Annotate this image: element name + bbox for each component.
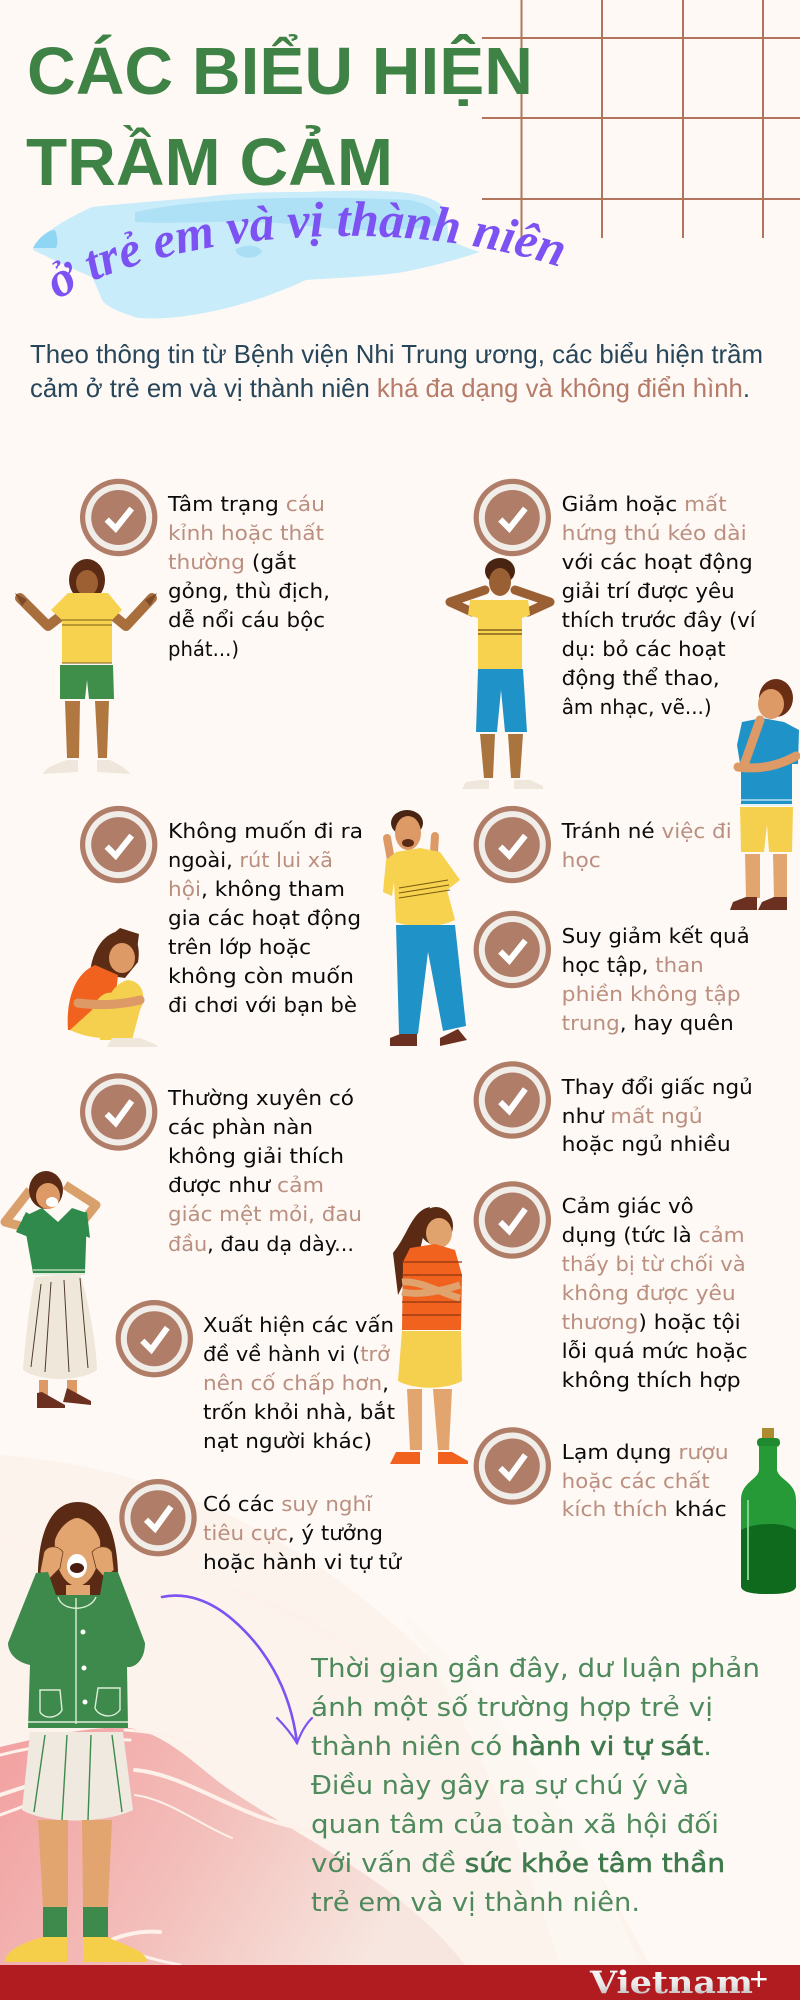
closing text: trẻ em và vị thành niên. xyxy=(311,1888,640,1918)
figure: woman in green top holding head xyxy=(5,1171,97,1408)
icon: check 9 xyxy=(474,1061,551,1139)
decorative grid xyxy=(482,0,800,238)
text: symptom 8: Suy giảm kết quả xyxy=(562,924,750,948)
icon: check 3 xyxy=(80,1073,157,1151)
watercolor brush xyxy=(33,191,480,319)
text: symptom 4: trốn khỏi nhà, bắt xyxy=(203,1400,395,1424)
text: symptom 10: lỗi quá mức hoặc xyxy=(562,1338,748,1363)
text: symptom 2: Không muốn đi ra xyxy=(168,819,363,843)
bottom swoosh background xyxy=(0,1455,650,1965)
text: symptom 3: các phàn nàn xyxy=(168,1115,313,1139)
text: symptom 7: học xyxy=(562,848,601,872)
text: symptom 9 xyxy=(561,1075,753,1156)
intro text: Theo thông tin từ Bệnh viện Nhi Trung ương, các biểu hiện trầm xyxy=(30,339,763,369)
text: symptom 11 xyxy=(562,1440,729,1521)
icon: check 5 xyxy=(119,1479,197,1556)
text: symptom 10: Cảm giác vô xyxy=(562,1194,694,1218)
logo: Vietnam+: + xyxy=(749,1961,768,1997)
text: symptom 1: gỏng, thù địch, xyxy=(168,579,330,603)
figure: thinking boy in blue shirt xyxy=(730,679,799,910)
text: symptom 3: giác mệt mỏi, đau xyxy=(168,1202,362,1226)
figure: boy covering ears xyxy=(450,558,550,789)
text: symptom 2: gia các hoạt động xyxy=(168,906,361,930)
text: symptom 3: đầu, đau dạ dày... xyxy=(168,1232,354,1256)
text: symptom 9: như mất ngủ xyxy=(562,1104,703,1128)
icon: check 4 xyxy=(116,1300,193,1377)
icon: check 6 xyxy=(474,479,551,556)
text: symptom 4: đề về hành vi (trở xyxy=(203,1342,390,1366)
text: symptom 6: Giảm hoặc mất xyxy=(562,492,727,516)
figure: woman in orange striped shirt xyxy=(390,1207,468,1464)
text: symptom 7: Tránh né việc đi xyxy=(561,819,732,843)
title xyxy=(26,34,533,200)
figure: sitting sad girl xyxy=(68,928,157,1047)
closing text: ánh một số trường hợp trẻ vị xyxy=(311,1693,713,1723)
text: symptom 6: dụ: bỏ các hoạt xyxy=(562,637,726,661)
text: symptom 8: phiền không tập xyxy=(562,982,741,1006)
text: symptom 9: Thay đổi giấc ngủ xyxy=(561,1075,753,1099)
text: symptom 6: hứng thú kéo dài xyxy=(562,521,747,545)
text: symptom 10: không thích hợp xyxy=(562,1368,741,1392)
arrow xyxy=(162,1596,312,1743)
text: symptom 4: nên cố chấp hơn , xyxy=(203,1371,389,1395)
closing text xyxy=(310,1654,760,1918)
icon: green bottle xyxy=(741,1428,796,1594)
icon: check 10 xyxy=(474,1181,551,1259)
text: symptom 10: không được yêu xyxy=(562,1281,736,1305)
icon: check 1 xyxy=(80,479,157,556)
text: symptom 5: Có các suy nghĩ xyxy=(203,1492,373,1516)
text: symptom 5 xyxy=(203,1492,402,1574)
title: TRẦM CẢM xyxy=(26,125,393,200)
text: symptom 10 xyxy=(562,1194,748,1392)
text: symptom 3: được như cảm xyxy=(168,1173,324,1197)
closing text: Thời gian gần đây, dư luận phản xyxy=(310,1654,760,1684)
icon: check 7 xyxy=(474,806,551,883)
text: symptom 2: trên lớp hoặc xyxy=(168,935,311,959)
figure: big crying girl in green cardigan xyxy=(5,1502,147,1962)
text: symptom 3: không giải thích xyxy=(168,1144,344,1168)
text: symptom 6: giải trí được yêu xyxy=(562,579,735,603)
text: symptom 7 xyxy=(561,819,732,872)
text: symptom 8 xyxy=(562,924,750,1035)
text: symptom 2: đi chơi với bạn bè xyxy=(168,993,357,1017)
text: symptom 10: dụng (tức là cảm xyxy=(562,1223,745,1247)
icon: check 8 xyxy=(474,911,551,988)
text: symptom 2: không còn muốn xyxy=(168,964,354,988)
text: symptom 4: nạt người khác) xyxy=(203,1429,372,1453)
text: symptom 4 xyxy=(203,1313,395,1453)
closing text: quan tâm của toàn xã hội đối xyxy=(311,1810,719,1840)
text: symptom 8: học tập, than xyxy=(562,953,704,977)
text: symptom 9: hoặc ngủ nhiều xyxy=(562,1132,731,1156)
icon: check 11 xyxy=(474,1427,551,1505)
text: symptom 6: động thể thao, xyxy=(562,666,720,690)
title: CÁC BIỂU HIỆN xyxy=(27,34,533,109)
text: symptom 6: thích trước đây (ví xyxy=(562,608,757,632)
text: symptom 6 xyxy=(562,492,757,719)
text: symptom 1: Tâm trạng cáu xyxy=(167,492,325,516)
text: symptom 5: tiêu cực, ý tưởng xyxy=(203,1521,383,1545)
text: symptom 10: thấy bị từ chối và xyxy=(562,1252,746,1276)
text: symptom 2: hội, không tham xyxy=(168,877,345,901)
text: symptom 1: thường (gắt xyxy=(168,550,296,574)
intro text xyxy=(30,339,763,403)
subtitle: ở trẻ em và vị thành niên xyxy=(52,201,564,296)
text: symptom 4: Xuất hiện các vấn xyxy=(203,1313,394,1337)
figure: crying man in yellow sweater xyxy=(383,810,467,1046)
text: symptom 11: kích thích khác xyxy=(562,1497,727,1521)
text: symptom 1: kỉnh hoặc thất xyxy=(168,521,324,545)
text: symptom 8: trung, hay quên xyxy=(562,1011,734,1035)
text: symptom 6: với các hoạt động xyxy=(562,550,753,574)
text: symptom 1 xyxy=(167,492,330,661)
text: symptom 10: thương) hoặc tội xyxy=(562,1310,741,1334)
text: symptom 2 xyxy=(168,819,363,1017)
text: symptom 3 xyxy=(167,1086,362,1256)
footer bar xyxy=(0,1965,800,2000)
closing text: với vấn đề sức khỏe tâm thần xyxy=(311,1849,725,1879)
text: symptom 1: phát...) xyxy=(168,637,239,661)
figure: woman in yellow shirt shrugging xyxy=(15,559,157,774)
icon: check 2 xyxy=(80,806,157,883)
text: symptom 2: ngoài, rút lui xã xyxy=(168,848,333,872)
text: symptom 5: hoặc hành vi tự tử xyxy=(203,1550,402,1574)
text: symptom 11: Lạm dụng rượu xyxy=(562,1440,729,1464)
text: symptom 3: Thường xuyên có xyxy=(167,1086,354,1110)
text: symptom 6: âm nhạc, vẽ...) xyxy=(562,695,712,719)
intro text: cảm ở trẻ em và vị thành niên khá đa dạng và không điển hình. xyxy=(30,373,750,403)
closing text: thành niên có hành vi tự sát . xyxy=(311,1732,712,1762)
closing text: Điều này gây ra sự chú ý và xyxy=(311,1771,689,1801)
text: symptom 1: dễ nổi cáu bộc xyxy=(168,607,325,632)
text: symptom 11: hoặc các chất xyxy=(562,1469,710,1493)
logo: Vietnam+: Vietnam xyxy=(589,1965,753,2000)
